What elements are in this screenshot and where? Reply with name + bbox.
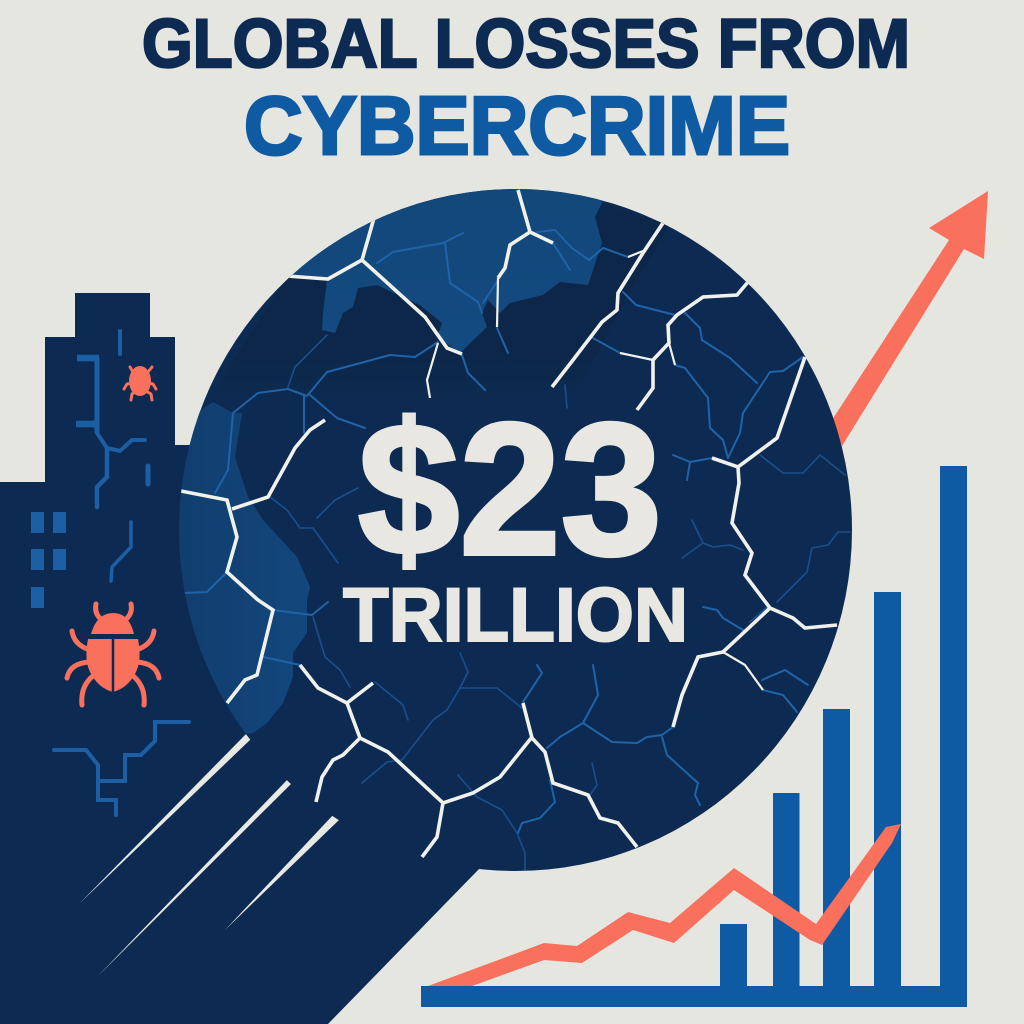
- city silhouette: [0, 293, 479, 1024]
- title: [142, 5, 910, 172]
- trend line: [428, 824, 901, 986]
- white cracks: [181, 190, 837, 857]
- continent: left: [170, 402, 310, 740]
- title: GLOBAL LOSSES FROM: [142, 5, 910, 82]
- dark land shadow: [232, 204, 669, 364]
- icon: large bug: [67, 604, 159, 705]
- bar chart: [421, 466, 967, 1007]
- title: CYBERCRIME: [244, 79, 790, 172]
- blue fissures: [185, 230, 850, 870]
- arrow: rising trend: [832, 191, 988, 446]
- unit label: TRILLION: [343, 573, 688, 658]
- circuit cracks on building: [54, 331, 189, 815]
- icon: small bug: [124, 366, 156, 400]
- building windows: [31, 512, 66, 608]
- speed streaks: [79, 734, 339, 977]
- panel: cracked globe: [170, 170, 852, 871]
- big number: $23: [358, 384, 662, 594]
- continent: top: [291, 189, 602, 352]
